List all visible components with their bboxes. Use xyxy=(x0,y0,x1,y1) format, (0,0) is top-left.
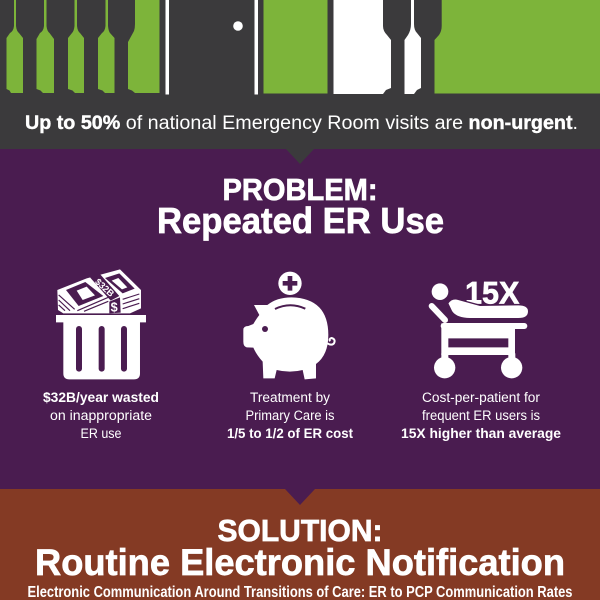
caption: primary care cost xyxy=(227,390,353,441)
pointer into solution panel xyxy=(285,489,315,505)
caption: wasted cost xyxy=(43,390,159,441)
heading: solution: Routine Electronic Notification xyxy=(35,542,565,583)
caption: frequent users cost: Cost-per-patient for xyxy=(422,390,540,405)
headline statistic: Up to 50% of national Emergency Room visits are non-urgent. xyxy=(25,113,578,134)
icon: money in trash can xyxy=(56,269,146,379)
heading: solution xyxy=(35,513,565,583)
illustration: people queueing at the door xyxy=(6,0,600,94)
caption: primary care cost: 1/5 to 1/2 of ER cost xyxy=(227,426,353,441)
caption: wasted cost: $32B/year wasted xyxy=(43,390,159,405)
caption: frequent users cost: frequent ER users is xyxy=(422,408,540,423)
panel: problem xyxy=(0,149,600,490)
caption: wasted cost: ER use xyxy=(80,426,122,441)
top band background xyxy=(0,0,600,150)
panel: solution xyxy=(0,489,600,600)
heading: problem: PROBLEM: xyxy=(222,172,378,207)
caption: frequent users cost: 15X higher than average xyxy=(401,426,562,441)
caption: primary care cost: Treatment by xyxy=(250,390,330,405)
icon: money in trash can: $32B xyxy=(93,277,116,299)
heading: problem: Repeated ER Use xyxy=(157,200,444,241)
icon: piggy bank with medical coin xyxy=(243,272,335,379)
heading: problem xyxy=(157,172,444,241)
pointer into problem panel xyxy=(286,149,314,164)
caption: wasted cost: on inappropriate xyxy=(50,408,152,423)
icon: patient on gurney, 15X xyxy=(432,276,529,378)
caption: frequent users cost xyxy=(401,390,562,441)
heading: solution: SOLUTION: xyxy=(218,513,382,548)
icon: patient on gurney, 15X: 15X xyxy=(465,276,519,311)
caption: primary care cost: Primary Care is xyxy=(246,408,335,423)
icon: money in trash can: $ xyxy=(111,301,118,315)
